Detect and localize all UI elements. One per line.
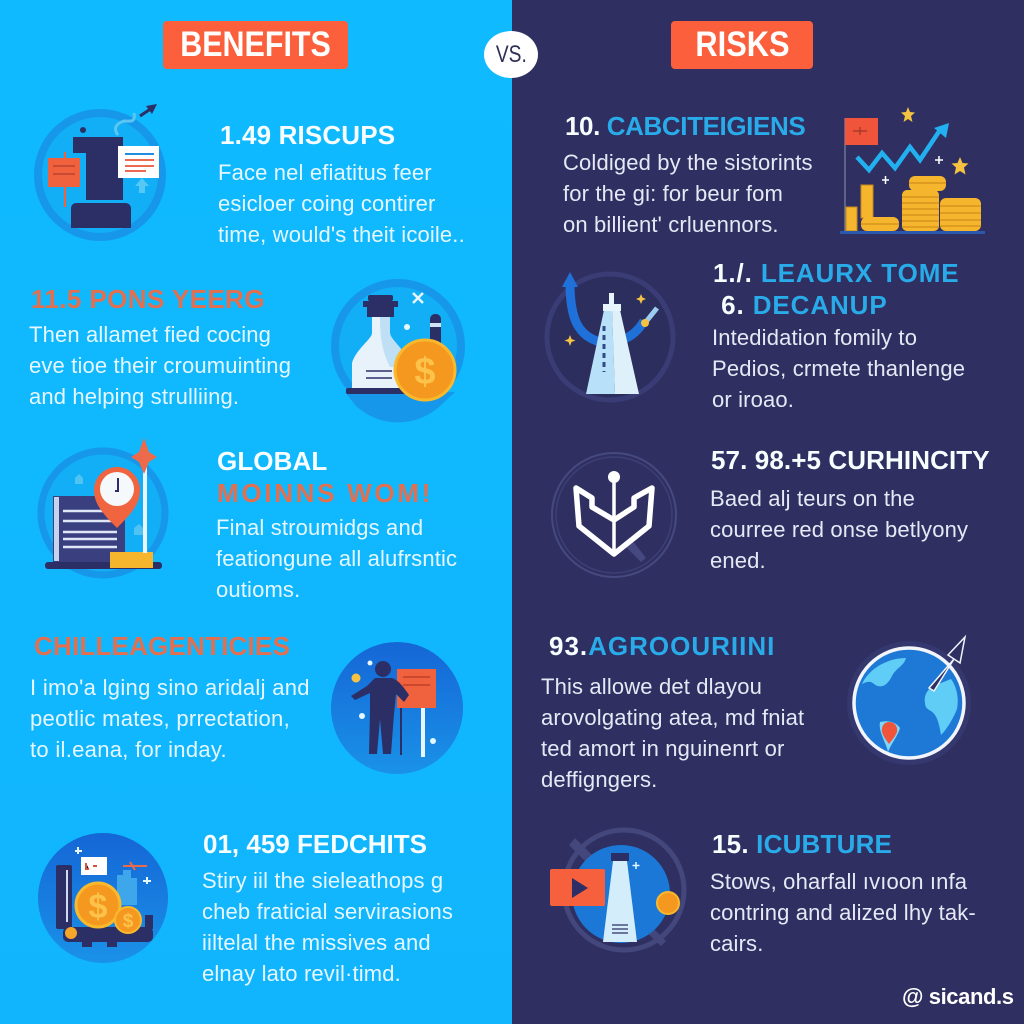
risk 1 text: Coldiged by the sistorints (563, 150, 813, 175)
risk 4 text: arovolgating atea, md fniat (541, 705, 804, 730)
icon: risk 2 tower (547, 272, 673, 400)
risk 2 heading: 1./. LEAURX TOME (713, 258, 960, 288)
risk 3 text: Baed alj teurs on the (710, 486, 915, 511)
risk 1 text (563, 150, 813, 237)
risk 1 text: on billient' crluennors. (563, 212, 779, 237)
risk 5 text: contring and alized lhy tak- (710, 900, 976, 925)
risk 5 text: cairs. (710, 931, 763, 956)
risk 3 text: ened. (710, 548, 766, 573)
benefit 5 text: iiltelal the missives and (202, 930, 431, 955)
icon: benefit 2 flask and coin: $ (414, 351, 436, 393)
benefit 1 text: esicloer coing contirer (218, 191, 435, 216)
icon: benefit 4 presenter (331, 642, 463, 774)
benefit 2 text: and helping strulliing. (29, 384, 239, 409)
benefit 4 heading: CHILLEAGENTICIES (34, 631, 290, 661)
icon: risk 5 tower and video (550, 830, 684, 950)
heading: risks (671, 21, 813, 69)
risk 3 heading: 57. 98.+5 CURHINCITY (711, 445, 990, 475)
risk 2 text: Intedidation fomily to (712, 325, 917, 350)
benefit 3 text: feationgune all alufrsntic (216, 546, 457, 571)
benefit 3 text: outioms. (216, 577, 300, 602)
benefit 2 heading: 11.5 PONS YEERG (31, 284, 265, 314)
heading: risks: RISKS (695, 25, 789, 64)
risk 4 text: This allowe det dlayou (541, 674, 762, 699)
risk 3 text: courree red onse betlyony (710, 517, 968, 542)
benefit 2 text: Then allamet fied cocing (29, 322, 271, 347)
risk 2 text (712, 325, 965, 412)
benefit 5 text: cheb fraticial servirasions (202, 899, 453, 924)
benefit 1 text: time, would's theit icoile.. (218, 222, 465, 247)
panel: benefits background (0, 0, 512, 1024)
benefit 1 text: Face nel efiatitus feer (218, 160, 432, 185)
risk 3 text (710, 486, 968, 573)
icon: benefit 3 laptop and pin (41, 438, 165, 575)
benefit 5 text: elnay lato revil·timd. (202, 961, 401, 986)
risk 2 heading: 6. DECANUP (721, 290, 888, 320)
benefit 2 text (29, 322, 291, 409)
risk 5 heading: 15. ICUBTURE (712, 829, 892, 859)
benefit 4 text (30, 675, 310, 762)
risk 4 heading: 93.AGROOURIINI (549, 631, 775, 661)
icon: risk 4 globe (847, 637, 971, 765)
icon: benefit 1 machine (38, 104, 162, 237)
risk 4 text: ted amort in nguinenrt or (541, 736, 784, 761)
benefit 5 text: Stiry iil the sieleathops g (202, 868, 443, 893)
risk 5 text (710, 869, 976, 956)
risk 4 text (541, 674, 804, 792)
vs badge: VS. (496, 41, 526, 68)
benefit 3 text (216, 515, 457, 602)
risk 2 heading (713, 258, 960, 320)
icon: benefit 2 flask and coin (335, 283, 461, 422)
benefit 1 heading: 1.49 RISCUPS (220, 120, 395, 150)
logo text: @ sicand.s (902, 984, 1014, 1009)
risk 4 text: deffigngers. (541, 767, 657, 792)
icon: benefit 5 coins on monitor (38, 833, 168, 963)
vs badge (484, 31, 538, 78)
benefit 3 heading: MOINNS WOM! (217, 478, 433, 508)
benefit 1 text (218, 160, 465, 247)
benefit 3 heading (217, 446, 433, 508)
risk 1 text: for the gi: for beur fom (563, 181, 783, 206)
icon: risk 3 shield (552, 453, 676, 577)
benefit 5 heading: 01, 459 FEDCHITS (203, 829, 427, 859)
risk 5 text: Stows, oharfall ıvıoon ınfa (710, 869, 967, 894)
icon: benefit 5 coins on monitor: $ (123, 911, 134, 932)
benefit 3 heading: GLOBAL (217, 446, 327, 476)
benefit 5 text (202, 868, 453, 986)
icon: risk 1 coins and chart (840, 107, 985, 234)
benefit 4 text: I imo'a lging sino aridalj and (30, 675, 310, 700)
heading: benefits: BENEFITS (180, 25, 331, 64)
benefit 4 text: to il.eana, for inday. (30, 737, 227, 762)
heading: benefits (163, 21, 348, 69)
benefit 2 text: eve tioe their croumuinting (29, 353, 291, 378)
icon: benefit 5 coins on monitor: $ (89, 888, 108, 926)
benefit 4 text: peotlic mates, prrectation, (30, 706, 290, 731)
risk 2 text: Pedios, crmete thanlenge (712, 356, 965, 381)
risk 1 heading: 10. CABCITEIGIENS (565, 111, 805, 141)
benefit 3 text: Final stroumidgs and (216, 515, 423, 540)
risk 2 text: or iroao. (712, 387, 794, 412)
